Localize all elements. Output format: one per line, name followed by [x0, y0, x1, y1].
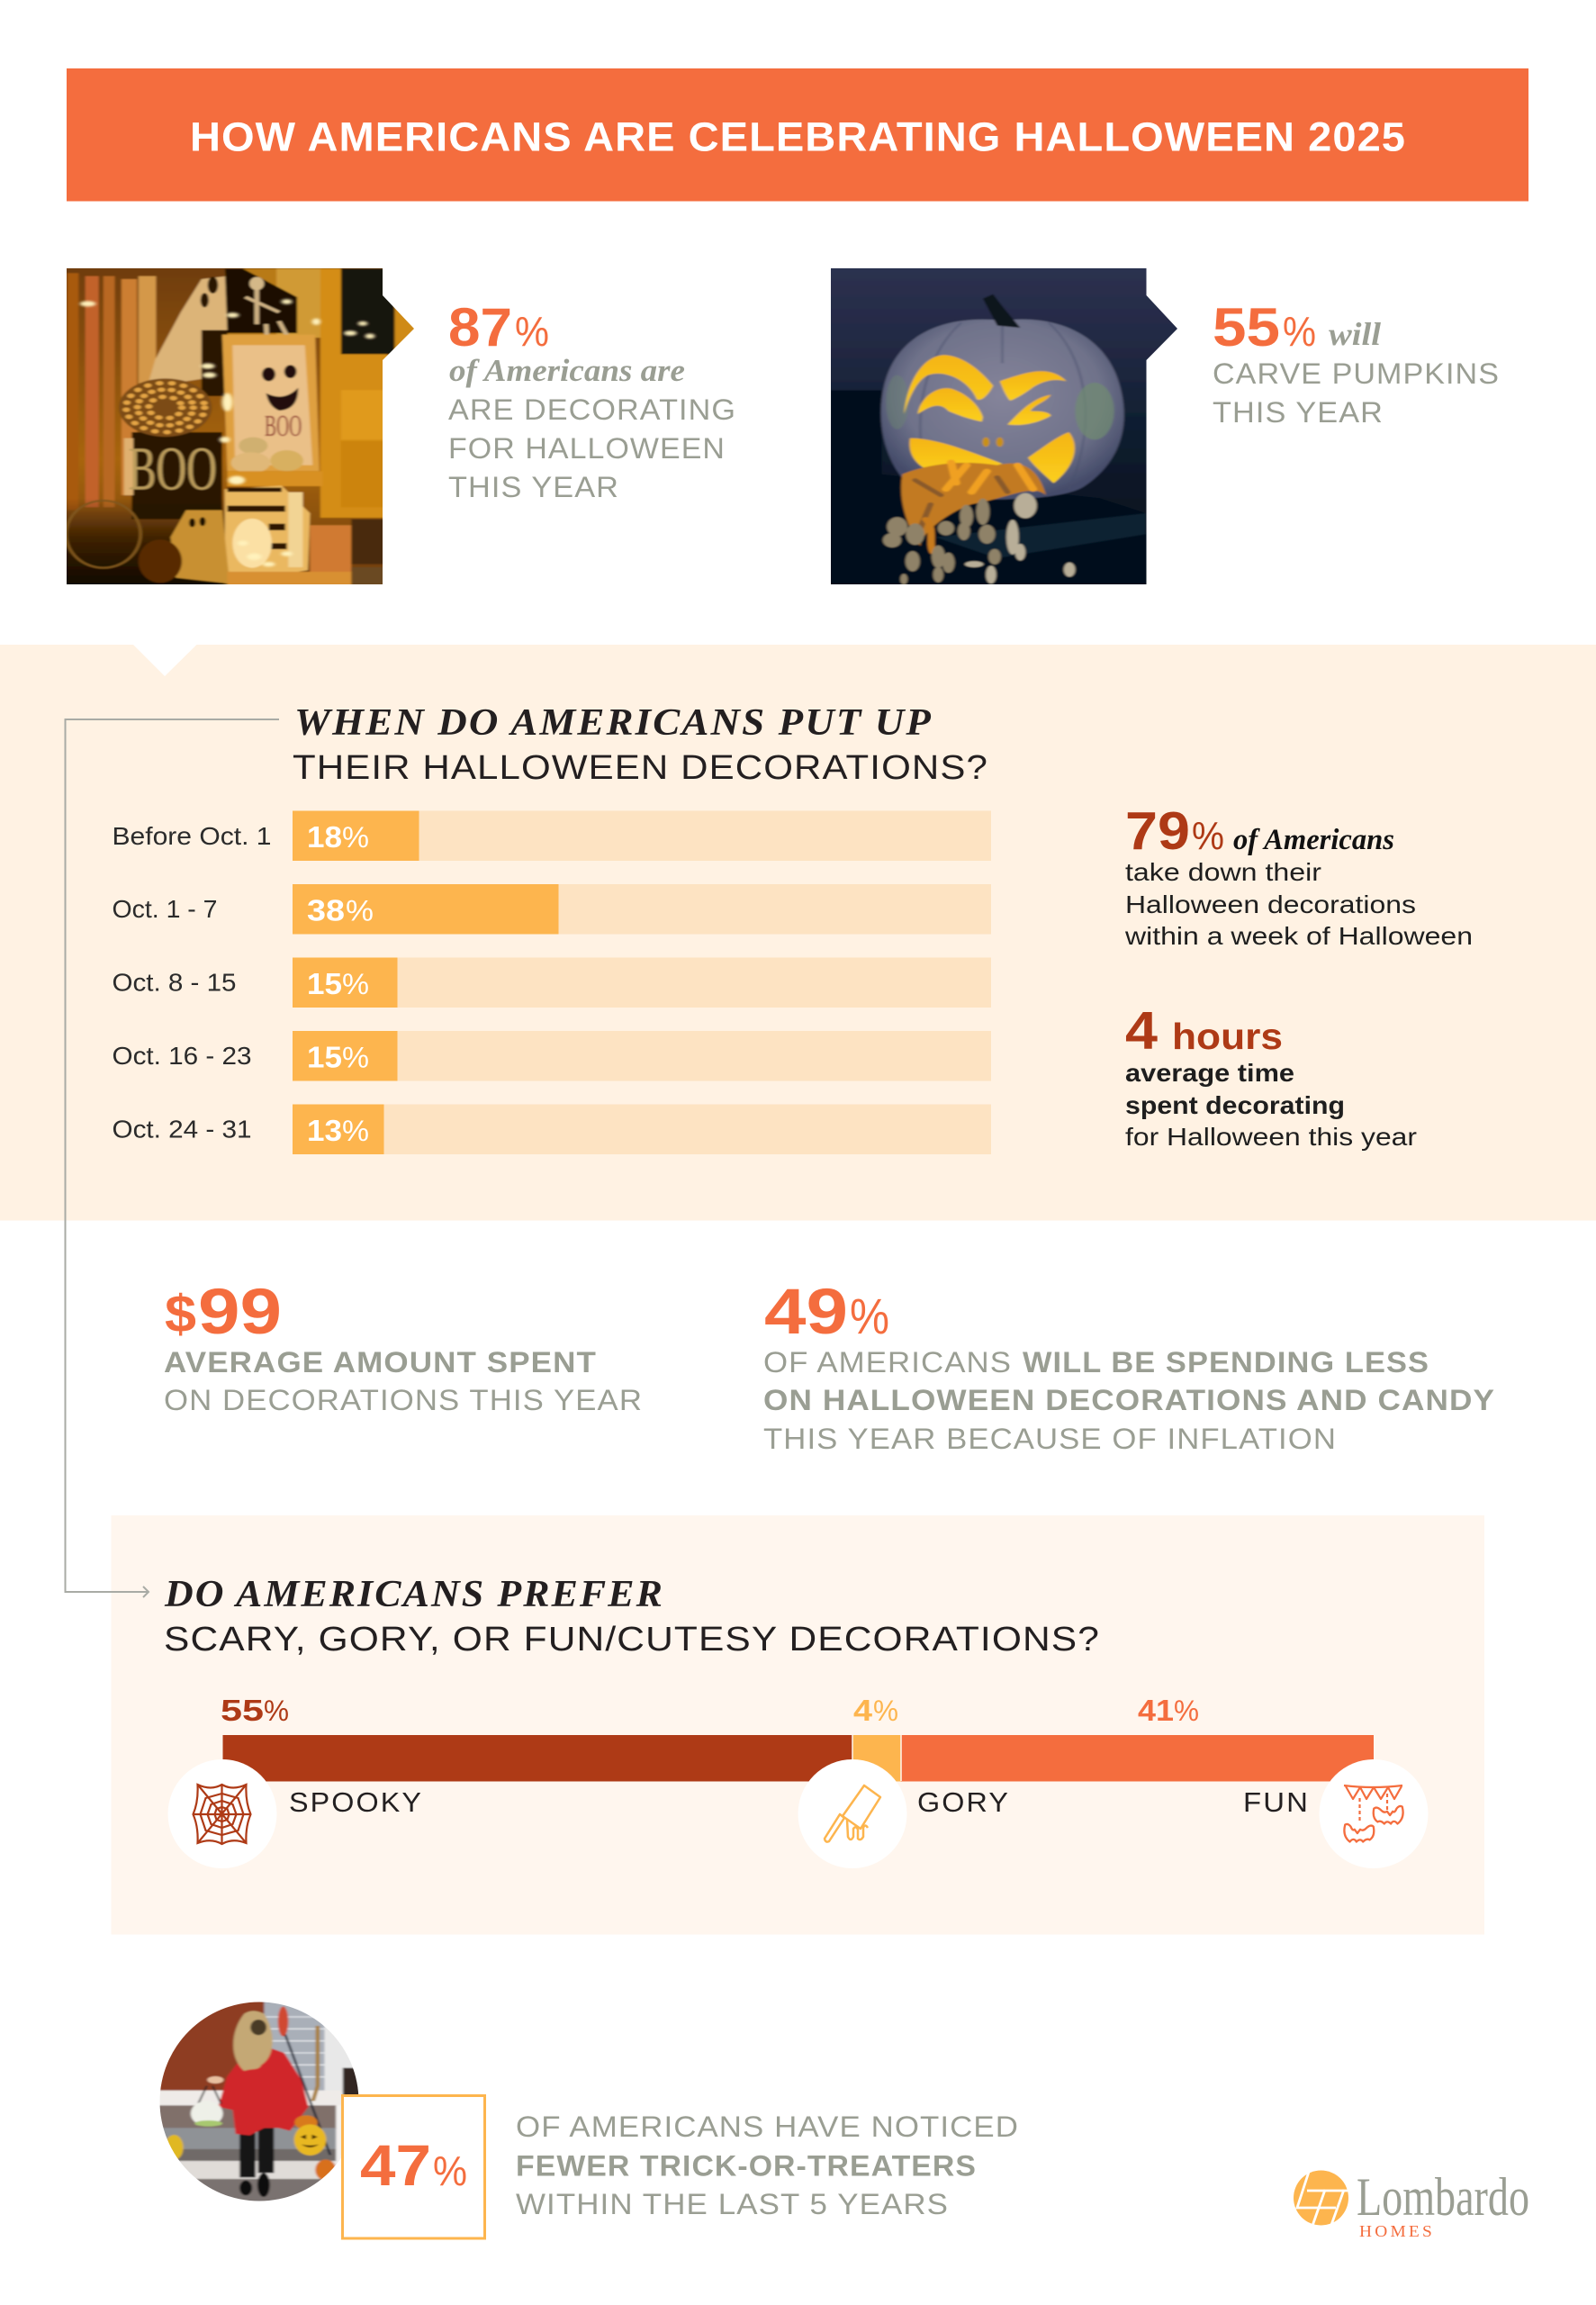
bar chart: decoration timing: %: [342, 1041, 369, 1073]
photo: trick-or-treater: [160, 2002, 358, 2201]
stat: 4 hours: for Halloween this year: [1125, 1123, 1417, 1151]
stat: 87% decorating: THIS YEAR: [448, 471, 619, 503]
stat: 49% spending less: ON HALLOWEEN DECORATIONS AND CANDY: [763, 1384, 1495, 1416]
photo: decorated porch: BOO: [265, 410, 302, 443]
photo: decorated porch: BOO: [128, 434, 217, 502]
bar chart: decoration timing: %: [342, 968, 369, 1000]
arrow: connector from timing heading to preference heading: [65, 719, 279, 1597]
heading: when do Americans put up: THEIR HALLOWEEN DECORATIONS?: [293, 749, 988, 787]
bar chart: decoration timing: Oct. 24 - 31: [112, 1115, 252, 1143]
photo: carved pumpkin: [823, 264, 1187, 588]
stat: $99 average spend: ON DECORATIONS THIS YEAR: [164, 1384, 643, 1416]
bar chart: decoration timing: Oct. 16 - 23: [112, 1042, 252, 1070]
bar chart: decoration timing: 38: [307, 893, 345, 927]
icon: bloody cleaver: [798, 1759, 907, 1868]
stat: 49% spending less: [763, 1277, 1495, 1455]
stat box: 47%: %: [433, 2147, 467, 2194]
stacked bar: spooky gory fun: [221, 1694, 1374, 1781]
stat: 79% take down: 79: [1125, 801, 1190, 861]
text: fewer trick-or-treaters: [516, 2111, 1019, 2220]
icon: bunting with bats: [1320, 1759, 1428, 1868]
stat: 79% take down: of Americans: [1233, 824, 1394, 856]
bar chart: decoration timing: %: [342, 821, 369, 854]
stat: 4 hours: average time: [1125, 1059, 1294, 1087]
stat: 4 hours: 4: [1125, 1001, 1158, 1061]
bar chart: decoration timing: 15: [307, 967, 342, 1000]
label: gory: GORY: [917, 1786, 1010, 1818]
text: fewer trick-or-treaters: FEWER TRICK-OR-TREATERS: [516, 2150, 977, 2183]
stat: 87% decorating: [448, 297, 736, 503]
logo: Lombardo Homes: Lombardo: [1357, 2167, 1529, 2227]
stacked bar: spooky gory fun: 4: [853, 1694, 873, 1727]
stacked bar: spooky gory fun: %: [264, 1695, 289, 1727]
stat: 79% take down: take down their: [1125, 858, 1321, 886]
stat: 87% decorating: of Americans are: [449, 353, 685, 388]
heading: do Americans prefer: [164, 1574, 1100, 1659]
photo: decorated porch: [62, 266, 424, 588]
bar chart: decoration timing: Oct. 1 - 7: [112, 895, 218, 923]
stat: 55% carve pumpkins: will: [1329, 316, 1381, 352]
stacked bar: spooky gory fun: %: [873, 1695, 898, 1727]
stat: 79% take down: within a week of Halloween: [1124, 922, 1473, 950]
bar chart: decoration timing: 18: [307, 820, 342, 854]
text: fewer trick-or-treaters: WITHIN THE LAST 5 YEARS: [516, 2188, 949, 2220]
bar chart: decoration timing: 13: [307, 1114, 342, 1147]
stat: 87% decorating: FOR HALLOWEEN: [448, 432, 726, 465]
title banner: [67, 68, 1528, 202]
stat: $99 average spend: AVERAGE AMOUNT SPENT: [164, 1346, 597, 1378]
label: spooky: SPOOKY: [289, 1786, 423, 1818]
bar chart: decoration timing: Oct. 8 - 15: [112, 969, 236, 996]
heading: do Americans prefer: SCARY, GORY, OR FUN/CUTESY DECORATIONS?: [164, 1621, 1100, 1659]
stat box: 47%: [342, 2096, 484, 2238]
title banner: HOW AMERICANS ARE CELEBRATING HALLOWEEN 2025: [190, 113, 1406, 160]
stat: 49% spending less: 49: [764, 1277, 848, 1348]
bar chart: decoration timing: %: [342, 1115, 369, 1147]
stat: 49% spending less: THIS YEAR BECAUSE OF INFLATION: [763, 1423, 1337, 1455]
icon: spider web: [167, 1759, 277, 1868]
stat: $99 average spend: 99: [198, 1277, 282, 1348]
stacked bar: spooky gory fun: 41: [1138, 1694, 1174, 1727]
stat: 79% take down: [1124, 801, 1473, 950]
stat: 4 hours: hours: [1172, 1016, 1283, 1057]
stat: 49% spending less: OF AMERICANS: [763, 1346, 1012, 1378]
stat: 49% spending less: %: [850, 1288, 889, 1344]
stat box: 47%: 47: [360, 2133, 431, 2198]
stat: $99 average spend: $: [165, 1285, 196, 1343]
stat: 79% take down: %: [1192, 814, 1224, 858]
logo: Lombardo Homes: HOMES: [1359, 2222, 1435, 2240]
bar chart: decoration timing: [112, 810, 991, 1154]
label: fun: FUN: [1243, 1786, 1310, 1818]
stat: 55% carve pumpkins: [1213, 297, 1500, 429]
stat: 4 hours: [1125, 1001, 1417, 1151]
stat: 55% carve pumpkins: CARVE PUMPKINS: [1213, 357, 1500, 390]
stat: $99 average spend: [164, 1277, 643, 1416]
stat: 87% decorating: 87: [448, 297, 512, 357]
panel: decoration preference: [112, 1515, 1484, 1934]
stacked bar: spooky gory fun: 55: [221, 1694, 264, 1727]
stat: 4 hours: spent decorating: [1125, 1091, 1345, 1119]
text: fewer trick-or-treaters: OF AMERICANS HAVE NOTICED: [516, 2111, 1019, 2143]
heading: when do Americans put up: [293, 702, 988, 787]
bar chart: decoration timing: %: [346, 895, 374, 927]
stacked bar: spooky gory fun: %: [1174, 1695, 1199, 1727]
bar chart: decoration timing: 15: [307, 1041, 342, 1073]
bar chart: decoration timing: Before Oct. 1: [112, 822, 272, 850]
logo: Lombardo Homes: [1294, 2167, 1529, 2240]
stat: 87% decorating: %: [515, 308, 549, 355]
stat: 55% carve pumpkins: %: [1283, 308, 1316, 355]
stat: 87% decorating: ARE DECORATING: [448, 393, 736, 426]
heading: do Americans prefer: DO AMERICANS PREFER: [164, 1574, 664, 1615]
stat: 79% take down: Halloween decorations: [1125, 890, 1416, 918]
heading: when do Americans put up: WHEN DO AMERICANS PUT UP: [294, 702, 933, 744]
panel: when decorations go up: [0, 645, 1596, 1221]
stat: 49% spending less: WILL BE SPENDING LESS: [1023, 1346, 1429, 1378]
stat: 55% carve pumpkins: 55: [1213, 297, 1280, 357]
stat: 55% carve pumpkins: THIS YEAR: [1213, 396, 1384, 429]
